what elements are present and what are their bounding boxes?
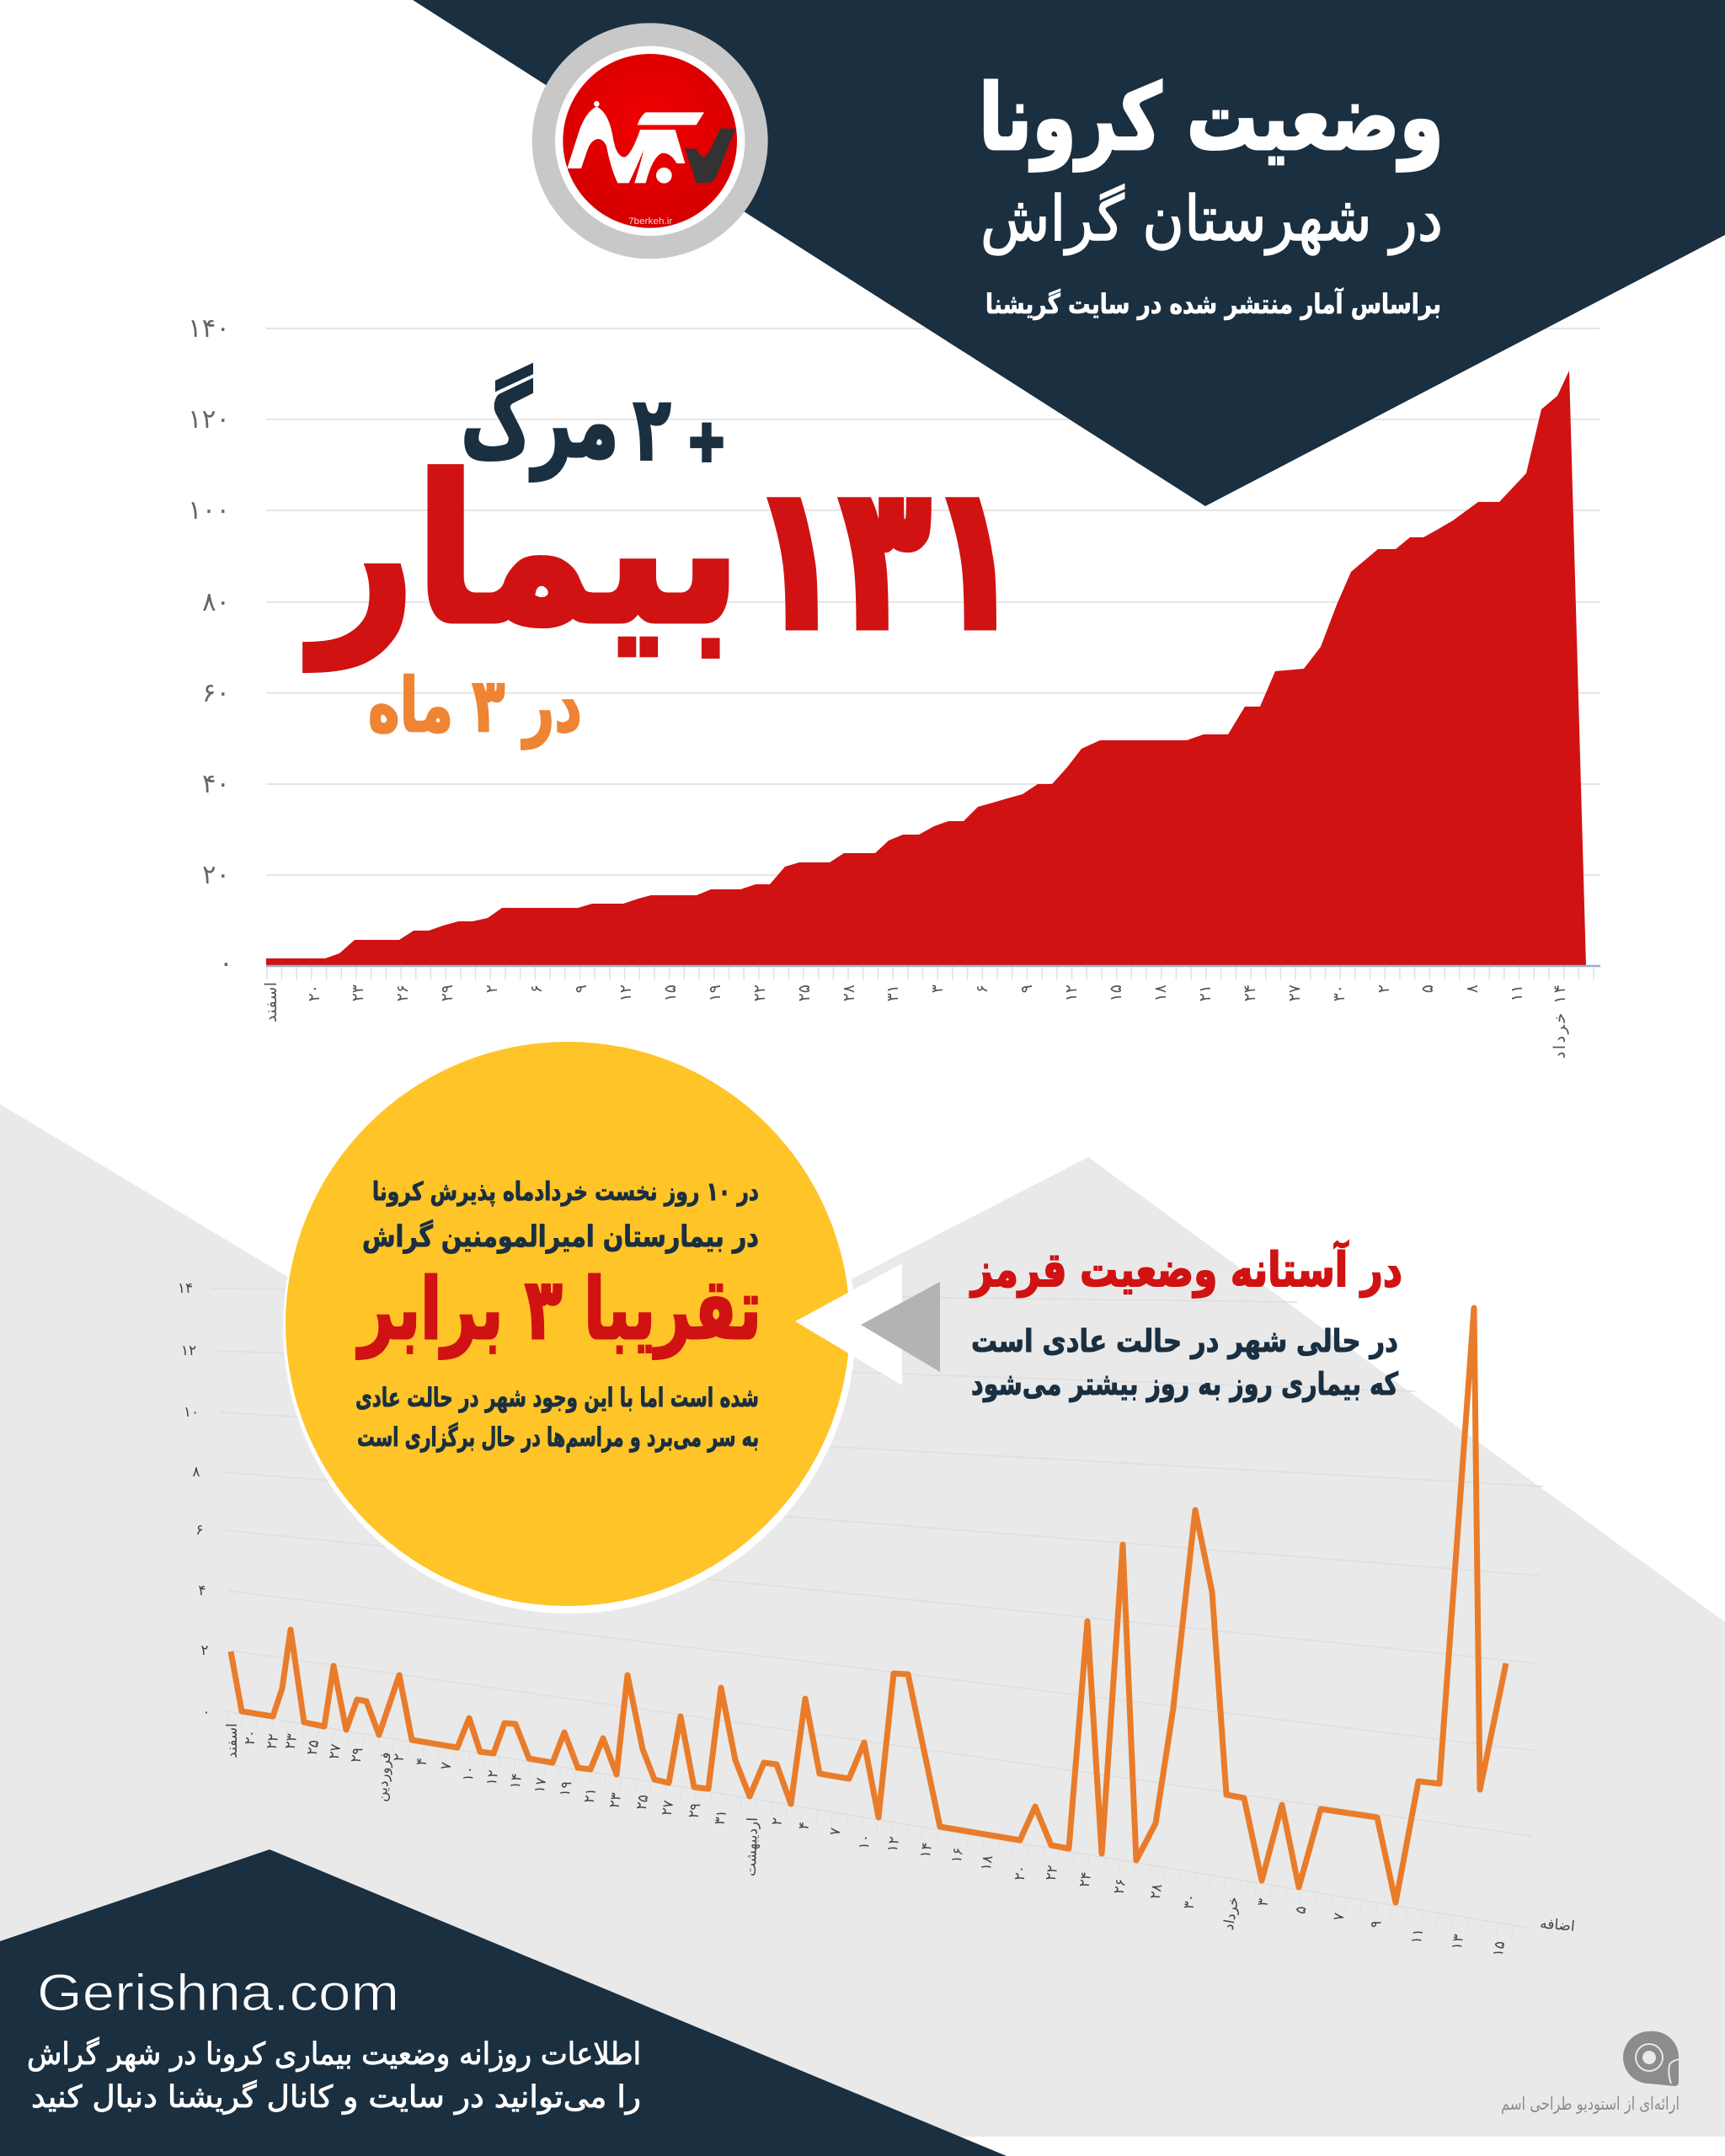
x axis labels: ۳۱ bbox=[884, 985, 902, 1001]
x axis labels: ۲۹ bbox=[686, 1801, 704, 1820]
icon: studio mark bbox=[1623, 2031, 1680, 2086]
footer website: Gerishna.com bbox=[37, 1964, 399, 2021]
x axis labels: ۲ bbox=[483, 985, 501, 993]
callout circle: hospital admissions bbox=[283, 1041, 856, 1614]
y axis labels: ۴ bbox=[198, 1582, 206, 1599]
circle text line 2: در بیمارستان امیرالمومنین گراش bbox=[362, 1219, 759, 1254]
x axis labels: اردیبهشت bbox=[743, 1817, 761, 1876]
x axis labels: ۱۰ bbox=[856, 1833, 874, 1851]
x axis labels: ۲۷ bbox=[1285, 985, 1304, 1001]
x axis labels: ۲۰ bbox=[1012, 1864, 1030, 1882]
x axis labels: اسفند bbox=[224, 1723, 241, 1758]
footer text: اطلاعات روزانه وضعیت بیماری کرونا در شهر گراش bbox=[27, 2036, 641, 2072]
x axis labels: ۱۹ bbox=[706, 985, 724, 1001]
y axis labels: ۰ bbox=[219, 948, 233, 979]
background: gray lower panel bbox=[0, 1104, 1725, 2137]
headline: 131 patients: بیمار bbox=[305, 433, 741, 670]
y axis labels: ۸۰ bbox=[202, 587, 230, 617]
x axis labels: ۲ bbox=[1375, 985, 1393, 993]
x axis labels: ۲۱ bbox=[1196, 985, 1215, 1001]
footer text: را می‌توانید در سایت و کانال گریشنا دنبال کنید bbox=[31, 2079, 641, 2115]
y axis labels bbox=[188, 313, 233, 979]
x axis labels: ۲۳ bbox=[349, 985, 367, 1001]
x axis labels: ۲۷ bbox=[326, 1742, 344, 1761]
x axis labels: ۷ bbox=[1330, 1912, 1348, 1922]
x axis labels: ۱۳ bbox=[1449, 1933, 1467, 1951]
circle text line 5: به سر می‌برد و مراسم‌ها در حال برگزاری است bbox=[357, 1422, 759, 1453]
x axis labels: ۲۲ bbox=[750, 985, 769, 1001]
x axis labels: ۸ bbox=[1463, 985, 1482, 993]
y axis labels bbox=[178, 1280, 211, 1721]
area chart: cumulative patients bbox=[188, 313, 1600, 1059]
x axis labels: ۱۴ bbox=[917, 1841, 936, 1860]
footer text bbox=[27, 2036, 641, 2115]
x axis labels: ۲۵ bbox=[633, 1793, 652, 1812]
y axis labels: ۱۴۰ bbox=[188, 313, 230, 344]
headline: 131 patients: ۱۳۱ bbox=[751, 445, 1019, 672]
x axis labels: ۲۲ bbox=[1043, 1864, 1061, 1882]
x axis labels: ۹ bbox=[1367, 1919, 1386, 1929]
x axis labels: ۳ bbox=[1254, 1897, 1273, 1908]
x axis labels: ۳ bbox=[928, 985, 947, 993]
x axis labels: ۵ bbox=[1292, 1905, 1311, 1915]
headline: plus two deaths: ۲ bbox=[633, 377, 671, 481]
studio credit bbox=[1501, 2031, 1680, 2115]
y axis labels: ۱۲ bbox=[181, 1342, 196, 1359]
x axis labels: ۴ bbox=[795, 1821, 814, 1831]
x axis labels: ۱۲ bbox=[1062, 985, 1081, 1001]
x axis labels: ۲۴ bbox=[1241, 985, 1259, 1001]
headline: plus two deaths: مرگ bbox=[461, 364, 619, 481]
y axis labels: ۲۰ bbox=[202, 860, 230, 890]
y axis labels: ۱۲۰ bbox=[188, 404, 230, 435]
x axis labels: ۱۲ bbox=[884, 1835, 903, 1854]
headline: plus two deaths: + bbox=[687, 408, 726, 473]
x axis labels: ۲۶ bbox=[1111, 1877, 1130, 1896]
y axis labels: ۶۰ bbox=[202, 678, 230, 708]
x axis labels: ۱۹ bbox=[557, 1780, 575, 1798]
y axis labels: ۱۰ bbox=[184, 1404, 199, 1421]
x axis labels: ۱۱ bbox=[1408, 1927, 1427, 1945]
x axis labels: ۶ bbox=[973, 985, 991, 993]
x axis labels: فروردین bbox=[373, 1752, 395, 1802]
x axis labels: ۲۵ bbox=[795, 985, 814, 1001]
y axis labels: ۴۰ bbox=[202, 769, 230, 799]
x axis labels: ۹ bbox=[1017, 985, 1036, 993]
x axis labels: ۱۴ bbox=[507, 1772, 526, 1790]
side note heading: در آستانه وضعیت قرمز bbox=[969, 1241, 1402, 1298]
x axis labels: ۱۷ bbox=[531, 1776, 550, 1795]
x axis labels: ۲۳ bbox=[606, 1791, 625, 1810]
x axis labels: ۲۸ bbox=[840, 985, 858, 1001]
y axis labels: ۱۴ bbox=[178, 1280, 193, 1297]
x axis labels: ۱۴ خرداد bbox=[1551, 985, 1569, 1059]
logo: 7berkeh badge bbox=[532, 23, 768, 259]
y axis labels: ۰ bbox=[202, 1704, 211, 1721]
x axis labels: ۳۰ bbox=[1181, 1892, 1199, 1911]
footer: dark bottom panel bbox=[0, 1849, 1007, 2156]
perspective line chart: daily new cases bbox=[178, 1280, 1576, 1958]
x axis labels: ۱۵ bbox=[661, 985, 680, 1001]
x axis labels: ۳۰ bbox=[1330, 985, 1348, 1001]
x axis labels: ۱۸ bbox=[978, 1854, 996, 1872]
x axis labels: ۷ bbox=[437, 1761, 456, 1771]
credit text: ارائه‌ای از استودیو طراحی اسم bbox=[1501, 2094, 1680, 2115]
x axis labels bbox=[224, 1723, 1576, 1958]
headline: 131 patients bbox=[305, 433, 1019, 672]
y axis labels: ۶ bbox=[195, 1522, 204, 1539]
x axis labels: اضافه bbox=[1539, 1915, 1576, 1935]
x axis labels: ۲۰ bbox=[305, 985, 323, 1001]
x axis labels: ۱۵ bbox=[1490, 1940, 1509, 1958]
subtitle: براساس آمار منتشر شده در سایت گریشنا bbox=[985, 287, 1441, 320]
title line 1: وضعیت کرونا bbox=[979, 66, 1444, 172]
x axis labels: ۲۲ bbox=[264, 1732, 282, 1751]
side note line 1: در حالی شهر در حالت عادی است bbox=[971, 1323, 1398, 1359]
x axis labels: ۲۷ bbox=[659, 1799, 677, 1817]
x axis labels: ۲۹ bbox=[438, 985, 457, 1001]
x axis labels: ۱۰ bbox=[460, 1764, 478, 1783]
y axis labels: ۲ bbox=[200, 1642, 209, 1659]
x axis labels: ۱۱ bbox=[1508, 985, 1526, 1001]
header: dark top panel bbox=[413, 0, 1725, 506]
x axis labels: ۱۵ bbox=[1107, 985, 1125, 1001]
x axis labels: ۲۸ bbox=[1147, 1882, 1166, 1901]
x axis labels: خرداد bbox=[1220, 1896, 1242, 1931]
x axis labels: ۲۰ bbox=[242, 1728, 260, 1747]
arrow: gray triangle bbox=[861, 1282, 940, 1372]
x axis labels: ۲۹ bbox=[348, 1746, 366, 1764]
x axis labels: ۱۲ bbox=[483, 1769, 502, 1787]
x axis labels: ۲ bbox=[768, 1817, 787, 1827]
x axis labels: ۲۵ bbox=[304, 1738, 323, 1757]
circle text line 1: در ۱۰ روز نخست خردادماه پذیرش کرونا bbox=[372, 1177, 759, 1207]
headline: in 3 months: در ۳ ماه bbox=[368, 662, 582, 749]
x axis labels: ۴ bbox=[413, 1757, 431, 1767]
x axis labels: ۱۶ bbox=[948, 1846, 967, 1865]
x axis labels: ۲۶ bbox=[393, 985, 412, 1001]
logo: 7berkeh badge: 7berkeh.ir bbox=[628, 216, 673, 227]
title line 2: در شهرستان گراش bbox=[980, 183, 1443, 255]
x axis labels: ۳۱ bbox=[712, 1808, 730, 1827]
x axis labels: ۱۲ bbox=[617, 985, 635, 1001]
x axis labels: ۲ bbox=[390, 1753, 409, 1763]
title block bbox=[979, 66, 1444, 320]
red area series bbox=[266, 371, 1586, 965]
x axis labels: ۲۱ bbox=[581, 1786, 600, 1805]
x axis labels: ۹ bbox=[572, 985, 590, 993]
side note line 2: که بیماری روز به روز بیشتر می‌شود bbox=[971, 1366, 1398, 1402]
x axis labels: ۷ bbox=[826, 1827, 845, 1837]
orange line series bbox=[231, 1308, 1506, 1903]
y axis labels: ۱۰۰ bbox=[188, 495, 230, 526]
arrow: white wedge bbox=[795, 1263, 902, 1385]
circle text line 4: شده است اما با این وجود شهر در حالت عادی bbox=[355, 1383, 759, 1413]
circle highlight: تقریبا ۳ برابر bbox=[355, 1260, 761, 1359]
x axis labels bbox=[262, 982, 1569, 1059]
x axis labels: ۶ bbox=[527, 985, 546, 993]
y axis labels: ۸ bbox=[192, 1464, 200, 1481]
x axis labels: ۵ bbox=[1418, 985, 1437, 993]
x axis labels: ۱۸ bbox=[1151, 985, 1170, 1001]
x axis labels: اسفند bbox=[262, 982, 280, 1022]
x axis labels: ۲۳ bbox=[282, 1732, 301, 1751]
side note bbox=[969, 1241, 1402, 1402]
x axis labels: ۲۴ bbox=[1076, 1870, 1095, 1889]
